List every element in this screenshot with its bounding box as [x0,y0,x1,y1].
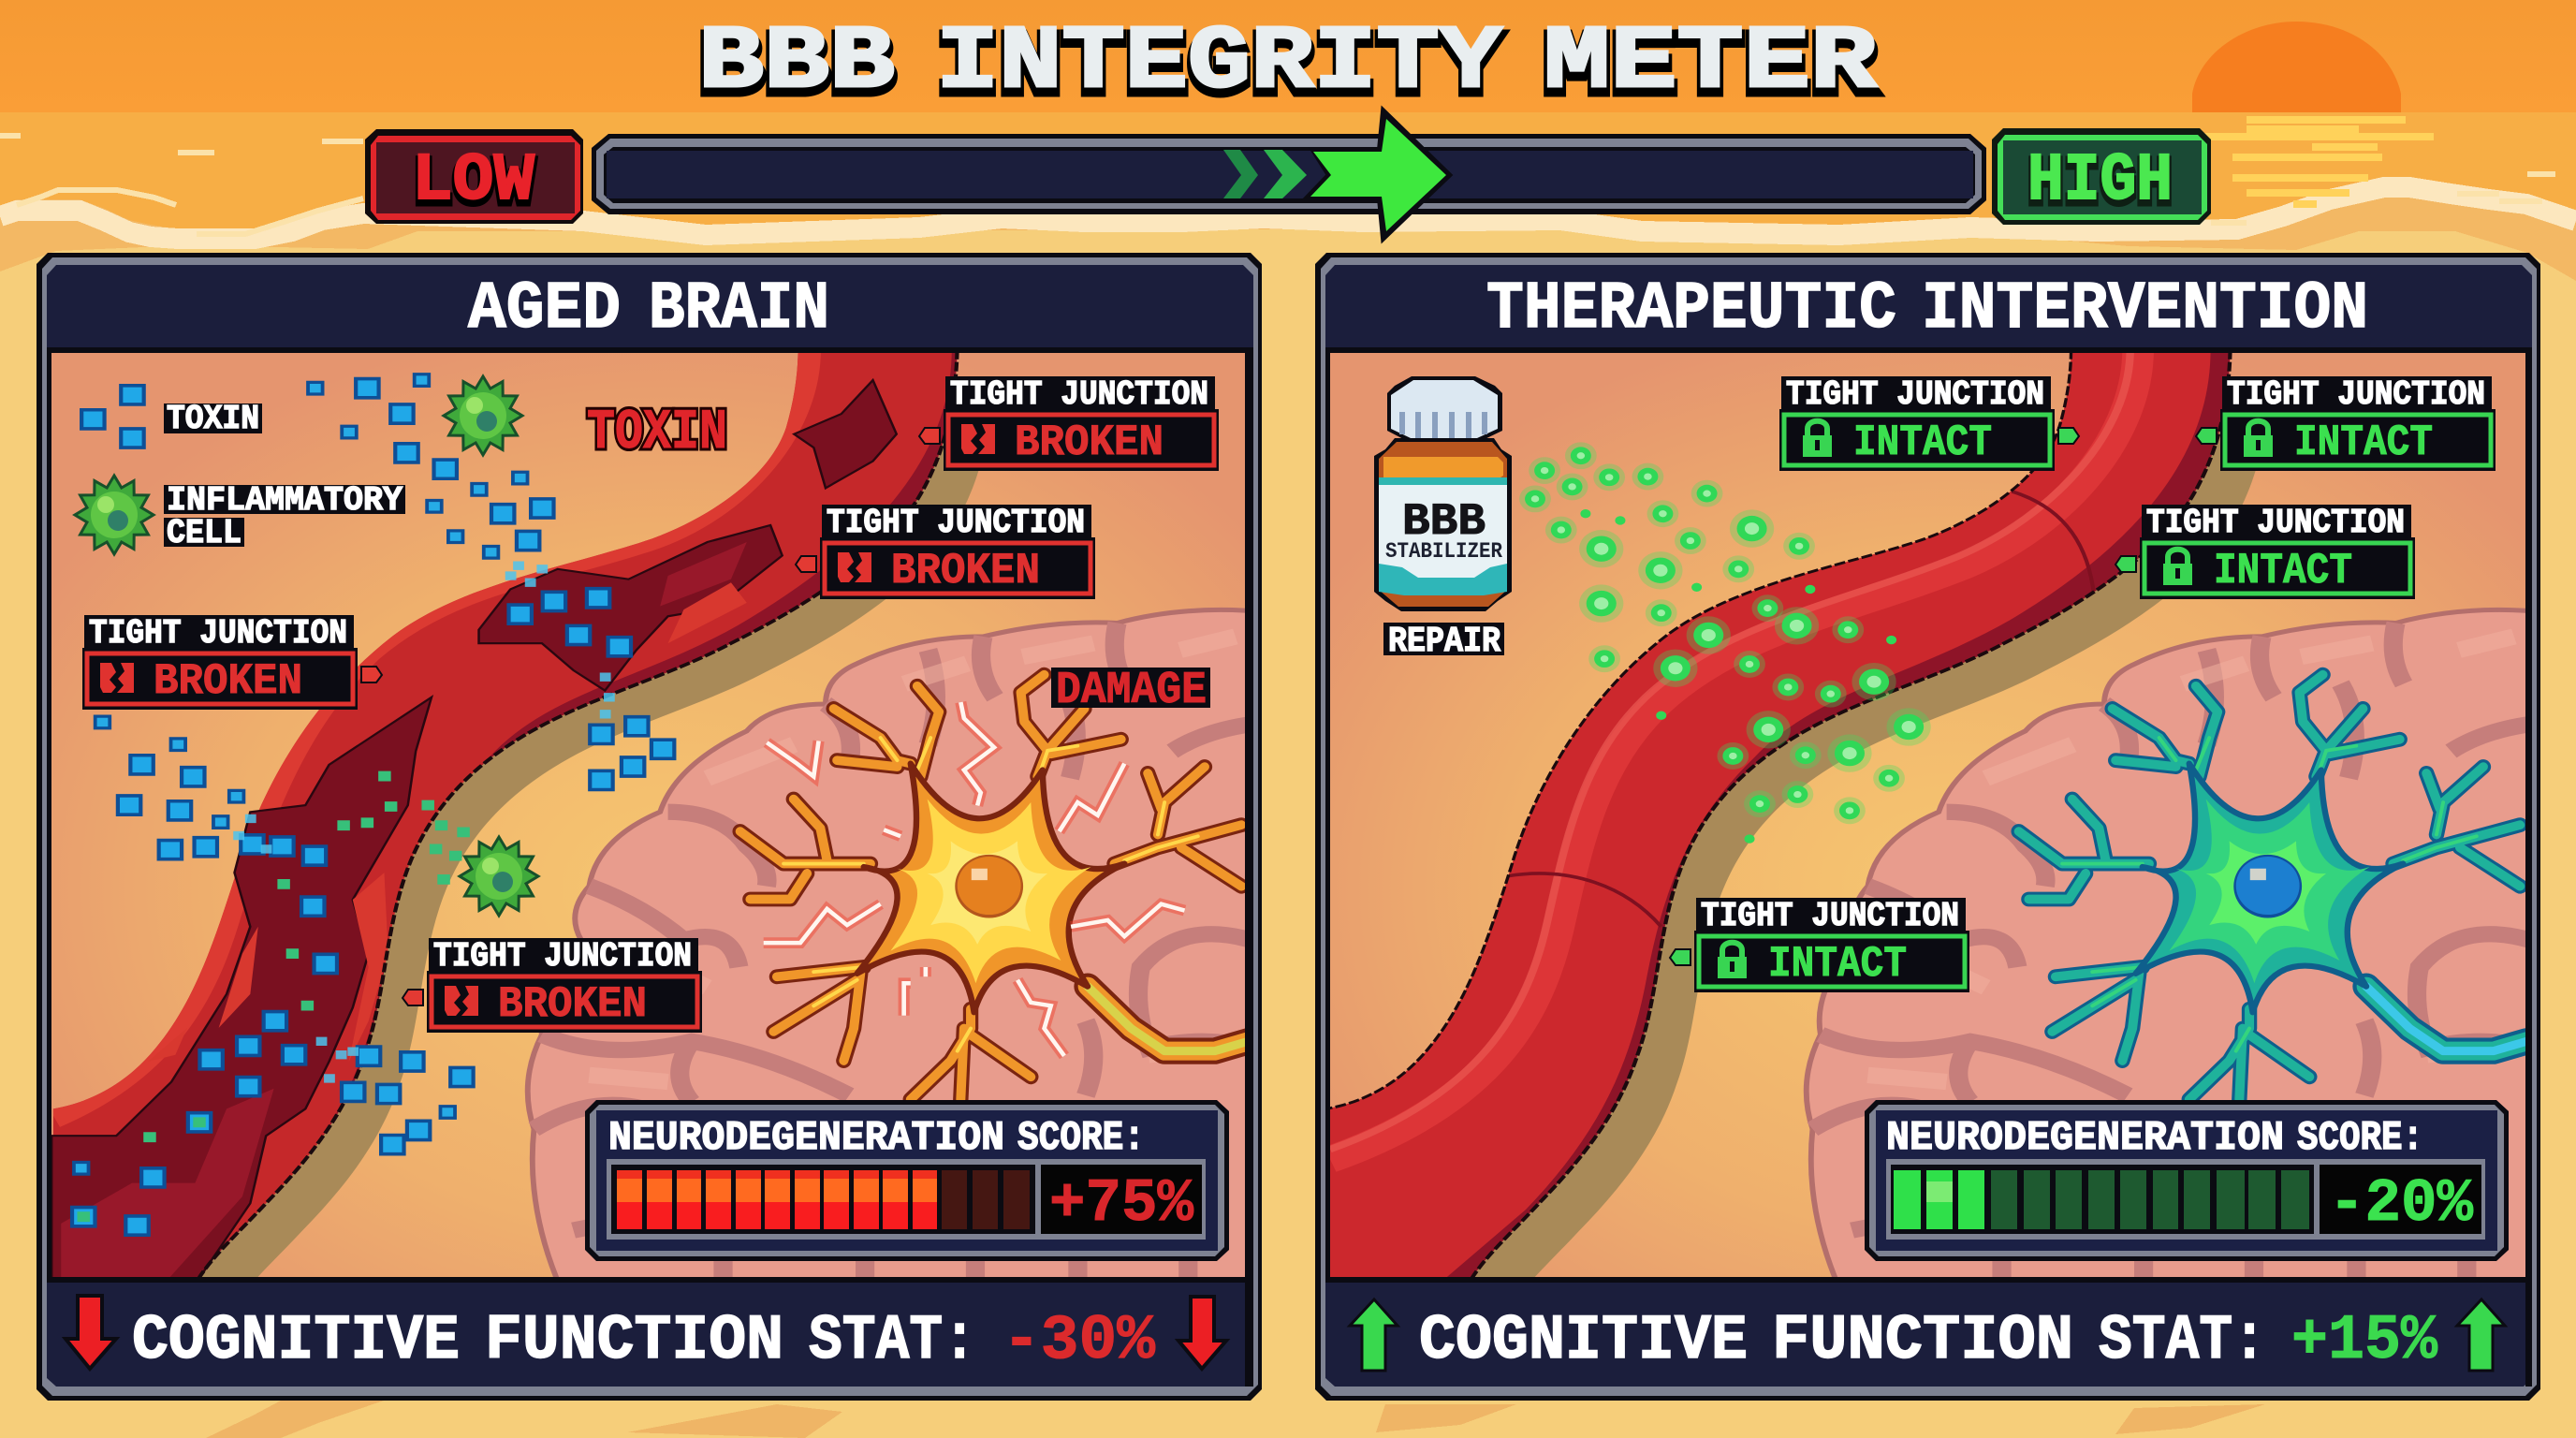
badge: tight junction intact 2: TIGHT JUNCTION [2227,375,2485,414]
footer: aged brain cognitive stat [47,1277,1253,1377]
footer: aged brain cognitive stat: FUNCTION [485,1305,783,1377]
bottom sand patches [206,1401,2265,1438]
footer: aged brain cognitive stat: COGNITIVE [132,1305,460,1377]
torn lumen sections [51,380,897,1284]
badge: tight junction broken 3: BROKEN [154,657,302,706]
badge: tight junction intact 3: TIGHT JUNCTION [2146,504,2405,542]
brain tissue [1807,609,2530,1281]
badge: tight junction broken 3 [82,614,382,710]
damage sparks [764,702,1185,1056]
footer: aged brain cognitive stat: STAT: [809,1305,976,1377]
title: BBB [698,18,895,120]
legend: inflammatory cell: INFLAMMATORY [167,481,402,520]
badge: tight junction intact 2: INTACT [2294,418,2433,467]
panel heading: therapeutic intervention [1486,272,2368,347]
sand waves [0,112,2576,281]
title: BBB [698,11,895,113]
badge: tight junction broken 1: TIGHT JUNCTION [950,375,1208,414]
badge: tight junction broken 2: TIGHT JUNCTION [827,504,1085,542]
icon: BBB stabilizer bottle [1374,376,1512,611]
meter: low label: LOW [412,149,534,224]
badge: tight junction broken 4: BROKEN [498,980,647,1029]
score panel: therapeutic neurodegeneration [1865,1100,2509,1261]
badge: tight junction intact 4 [1670,897,1969,992]
score panel: therapeutic neurodegeneration: SCORE: [2297,1115,2423,1162]
label: toxin: TOXIN [587,402,727,465]
badge: tight junction intact 1: TIGHT JUNCTION [1786,375,2044,414]
broken blood vessel [51,350,993,1313]
title: METER [1544,18,1877,120]
title: INTEGRITY [936,18,1502,120]
score panel: aged brain neurodegeneration: +75% [1049,1169,1194,1239]
title: METER [1544,11,1877,113]
legend: toxin: TOXIN [167,400,259,438]
meter: high label: HIGH [2027,149,2173,224]
badge: tight junction broken 3: TIGHT JUNCTION [89,614,347,653]
label: toxin: TOXIN [587,402,727,465]
label: repair: REPAIR [1388,622,1500,662]
meter: low label [365,129,583,224]
footer: therapeutic cognitive stat [1325,1277,2532,1377]
footer: therapeutic cognitive stat: +15% [2291,1305,2437,1377]
outlined vessel edge [195,350,958,1284]
footer: therapeutic cognitive stat: STAT: [2099,1305,2266,1377]
panel: aged brain [37,253,1262,1401]
meter: green progress arrow [1223,111,1449,238]
meter: high label: HIGH [2027,144,2173,219]
panel heading: aged brain [468,272,829,347]
label: damage: DAMAGE [1056,666,1207,716]
icon: green up arrow right [2457,1299,2505,1371]
scene: aged brain illustration [51,350,1251,1313]
icon: BBB stabilizer bottle: STABILIZER [1385,539,1502,564]
badge: tight junction intact 4: INTACT [1768,940,1907,989]
score segments [1894,1170,2309,1229]
badge: tight junction intact 1 [1779,375,2079,471]
score panel: aged brain neurodegeneration: NEURODEGENERATION [608,1115,1004,1162]
score panel: therapeutic neurodegeneration: -20% [2329,1169,2474,1239]
badge: tight junction intact 2 [2196,375,2496,471]
icon: red down arrow right [1178,1297,1226,1369]
panel heading: aged brain: BRAIN [649,272,829,347]
panel heading: therapeutic intervention: INTERVENTION [1922,272,2368,347]
legend: inflammatory cell [164,481,405,552]
panel heading: aged brain: AGED [468,272,621,347]
badge: tight junction broken 2 [796,504,1095,599]
footer: therapeutic cognitive stat: FUNCTION [1772,1305,2073,1377]
badge: tight junction intact 4: TIGHT JUNCTION [1701,897,1959,935]
bottle label text: BBB [1402,497,1486,548]
brain tissue [528,609,1251,1281]
healthy neuron [2019,675,2526,1099]
bottle cap [1387,376,1502,442]
title: INTEGRITY [936,11,1502,113]
score segments [617,1170,1030,1229]
score panel: aged brain neurodegeneration [585,1100,1229,1261]
inflammatory cells [75,376,538,916]
badge: tight junction intact 3 [2115,504,2415,599]
badge: tight junction broken 4: TIGHT JUNCTION [433,937,692,976]
bottle body [1374,438,1512,611]
score panel: therapeutic neurodegeneration: NEURODEGENERATION [1886,1115,2284,1162]
damaged neuron [740,675,1248,1099]
badge: tight junction broken 1: BROKEN [1015,418,1164,467]
healthy blood vessel [1326,350,2270,1313]
title [698,11,1877,120]
icon: red down arrow left [66,1296,116,1369]
panel: therapeutic intervention [1315,253,2540,1401]
repair particles [1535,456,1909,839]
panel heading: therapeutic intervention: THERAPEUTIC [1486,272,1896,347]
badge: tight junction broken 4 [402,937,702,1033]
badge: tight junction broken 2: BROKEN [891,547,1040,595]
icon: green up arrow left [1350,1299,1398,1371]
footer: aged brain cognitive stat: -30% [1003,1305,1155,1377]
badge: tight junction intact 1: INTACT [1853,418,1992,467]
meter: low label: LOW [412,144,534,219]
score panel: aged brain neurodegeneration: SCORE: [1017,1115,1145,1162]
toxin particles [83,389,664,1225]
scene: therapeutic illustration [1326,350,2530,1313]
badge: tight junction broken 1 [919,375,1219,471]
meter: integrity bar [592,134,1986,214]
legend: inflammatory cell: CELL [167,514,242,552]
badge: tight junction intact 3: INTACT [2214,547,2352,595]
sun [2192,22,2401,112]
meter: high label [1992,128,2211,225]
footer: therapeutic cognitive stat: COGNITIVE [1419,1305,1748,1377]
